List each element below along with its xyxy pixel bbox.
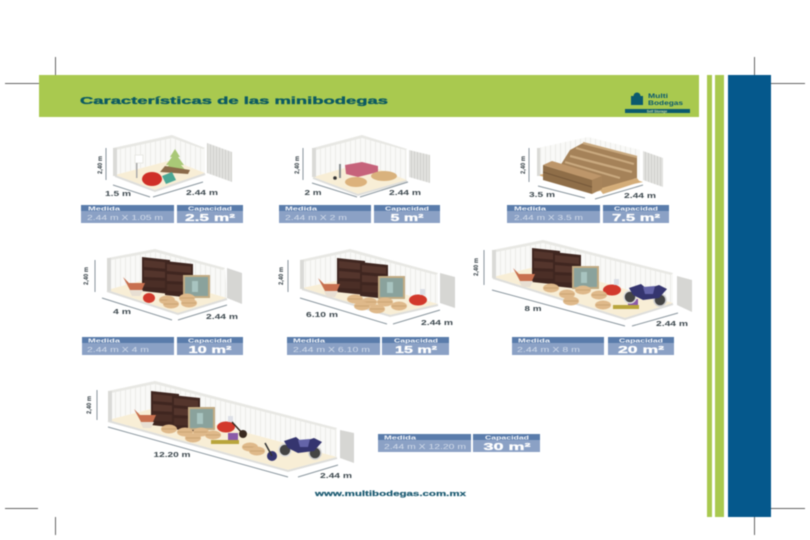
table: Capacidad [394,338,438,344]
table: 2.44 m X 3.5 m [514,213,583,222]
depth label: 2.44 m [389,190,421,197]
logo: Multi Bodegas: Multi [648,93,668,100]
depth label: 2.44 m [186,190,218,197]
table [512,337,674,356]
depth label: 2.44 m [656,321,688,328]
table: 20 m² [618,345,665,356]
height label: 2,40 m [278,267,285,285]
table: Capacidad [614,206,658,212]
height label: 2,40 m [97,156,104,174]
height label: 2,40 m [83,267,90,285]
table: 2.44 m X 6.10 m [293,345,370,354]
table: 2.5 m² [185,213,236,224]
unit 6.10 m [288,249,455,324]
table: Capacidad [385,206,429,212]
table: 10 m² [188,345,233,356]
table: Medida [88,206,122,212]
unit 3.5 m [529,137,663,199]
header band [39,75,699,117]
table: 2.44 m X 1.05 m [87,213,163,222]
logo: Multi Bodegas [625,93,690,114]
table: Capacidad [188,338,232,344]
table: Capacidad [485,436,529,442]
width label: 4 m [113,309,131,316]
depth label: 2.44 m [320,473,352,480]
unit 2 m [303,135,430,197]
table: Medida [384,436,418,442]
table: Medida [293,338,327,344]
table [81,205,243,224]
table: Medida [88,338,122,344]
table [287,337,449,356]
depth label: 2.44 m [206,314,238,321]
logo: Multi Bodegas: Self Storage [647,110,667,114]
width label: 12.20 m [154,452,190,459]
depth label: 2.44 m [421,320,453,327]
height label: 2,40 m [294,156,301,174]
table: 5 m² [390,213,425,224]
table: 30 m² [484,442,532,453]
unit 4 m [95,249,242,320]
height label: 2,40 m [520,156,527,174]
width label: 1.5 m [105,191,131,198]
title: Características de las minibodegas [80,95,388,107]
height label: 2,40 m [86,396,93,414]
table: Capacidad [619,338,663,344]
table: 2.44 m X 8 m [517,345,580,354]
table: 2.44 m X 12.20 m [384,442,466,451]
height label: 2,40 m [473,258,480,276]
table [378,434,540,453]
table: 2.44 m X 4 m [87,345,149,354]
table [82,337,243,356]
unit 8 m [484,240,692,326]
table: Medida [518,338,552,344]
table: Medida [285,206,319,212]
unit 12.20 m [97,381,354,477]
green stripes [707,75,724,517]
table: 2.44 m X 2 m [285,213,347,222]
width label: 6.10 m [306,312,338,319]
unit 1.5 m [106,135,232,197]
table: 7.5 m² [612,213,661,224]
table [279,205,440,224]
width label: 2 m [304,190,322,197]
website: www.multibodegas.com.mx [313,491,466,498]
width label: 3.5 m [529,192,555,199]
depth label: 2.44 m [624,193,656,200]
blue band [728,75,771,517]
width label: 8 m [524,306,542,313]
table: 15 m² [395,345,438,356]
table [507,205,669,224]
logo: Multi Bodegas: Bodegas [648,100,683,107]
table: Medida [514,206,548,212]
table: Capacidad [188,206,232,212]
